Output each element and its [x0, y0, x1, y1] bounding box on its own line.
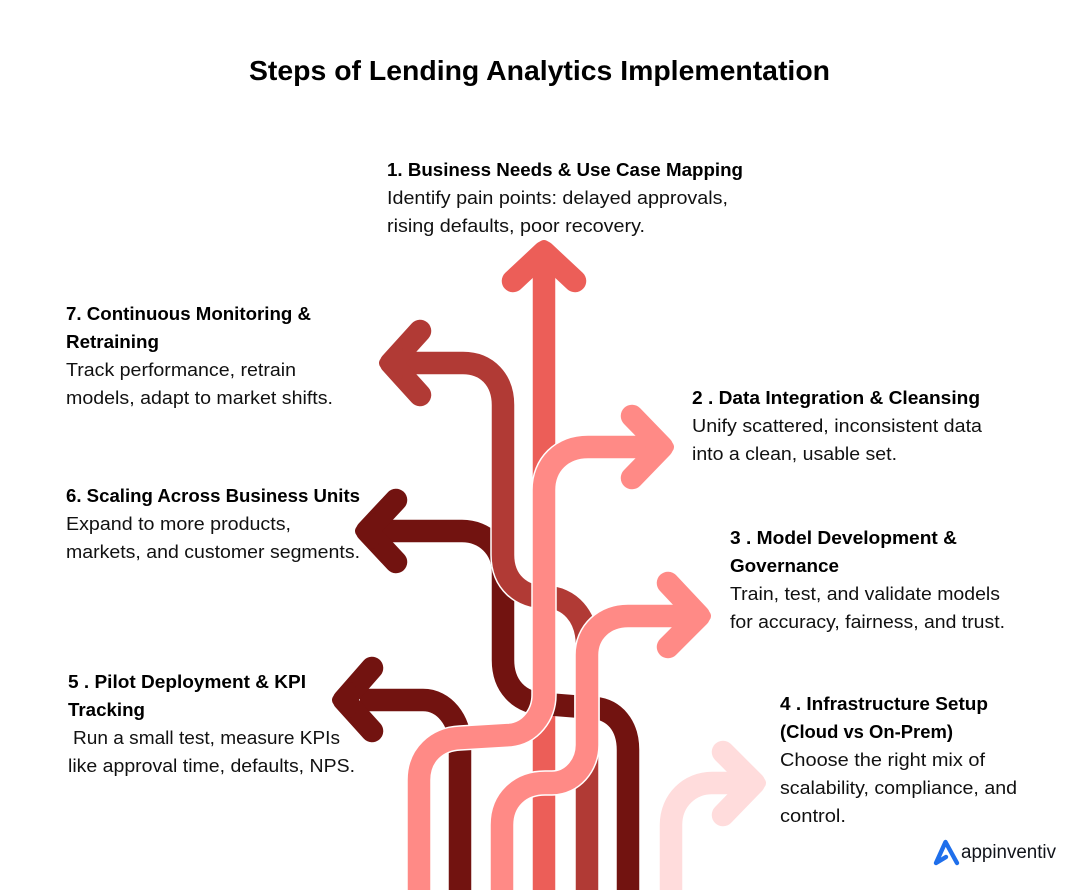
step 3 text: Governance [730, 555, 839, 576]
step 4 text: scalability, compliance, and [780, 777, 1017, 798]
step 7 text: 7. Continuous Monitoring & [66, 303, 311, 324]
arrow 4: infrastructure setup [671, 752, 760, 890]
step 6 text [66, 485, 360, 562]
title: Steps of Lending Analytics Implementation [249, 55, 830, 86]
arrow 7: continuous monitoring [385, 331, 587, 890]
step 1 text: rising defaults, poor recovery. [387, 215, 645, 236]
step 5 text: like approval time, defaults, NPS. [68, 755, 355, 776]
step 4 text: Choose the right mix of [780, 749, 986, 770]
step 5 text: Tracking [68, 699, 145, 720]
step 4 text [780, 693, 1017, 826]
step 3 text: 3 . Model Development & [730, 527, 957, 548]
step 7 text: models, adapt to market shifts. [66, 387, 333, 408]
step 3 text: for accuracy, fairness, and trust. [730, 611, 1005, 632]
step 3 text [730, 527, 1005, 632]
step 1 text: Identify pain points: delayed approvals, [387, 187, 728, 208]
step 2 text: 2 . Data Integration & Cleansing [692, 387, 980, 408]
step 4 text: (Cloud vs On-Prem) [780, 721, 953, 742]
step 2 text: into a clean, usable set. [692, 443, 897, 464]
logo: appinventiv: appinventiv [961, 842, 1056, 863]
step 5 text: 5 . Pilot Deployment & KPI [68, 671, 306, 692]
step 5 text: Run a small test, measure KPIs [73, 727, 340, 748]
arrow 5: pilot deployment [338, 668, 460, 890]
step 7 text: Retraining [66, 331, 159, 352]
step 3 text: Train, test, and validate models [730, 583, 1000, 604]
step 7 text [66, 303, 333, 408]
step 7 text: Track performance, retrain [66, 359, 296, 380]
step 6 text: markets, and customer segments. [66, 541, 360, 562]
step 2 text: Unify scattered, inconsistent data [692, 415, 983, 436]
arrow 3: model development [502, 583, 705, 890]
step 4 text: control. [780, 805, 846, 826]
step 2 text [692, 387, 983, 464]
step 4 text: 4 . Infrastructure Setup [780, 693, 988, 714]
step 1 text [387, 159, 743, 236]
step 1 text: 1. Business Needs & Use Case Mapping [387, 159, 743, 180]
step 6 text: 6. Scaling Across Business Units [66, 485, 360, 506]
arrow 2: data integration [419, 416, 668, 890]
step 6 text: Expand to more products, [66, 513, 291, 534]
step 5 text [68, 671, 355, 776]
arrow 1: business needs [513, 246, 575, 890]
arrow 6: scaling across business units [361, 500, 628, 890]
